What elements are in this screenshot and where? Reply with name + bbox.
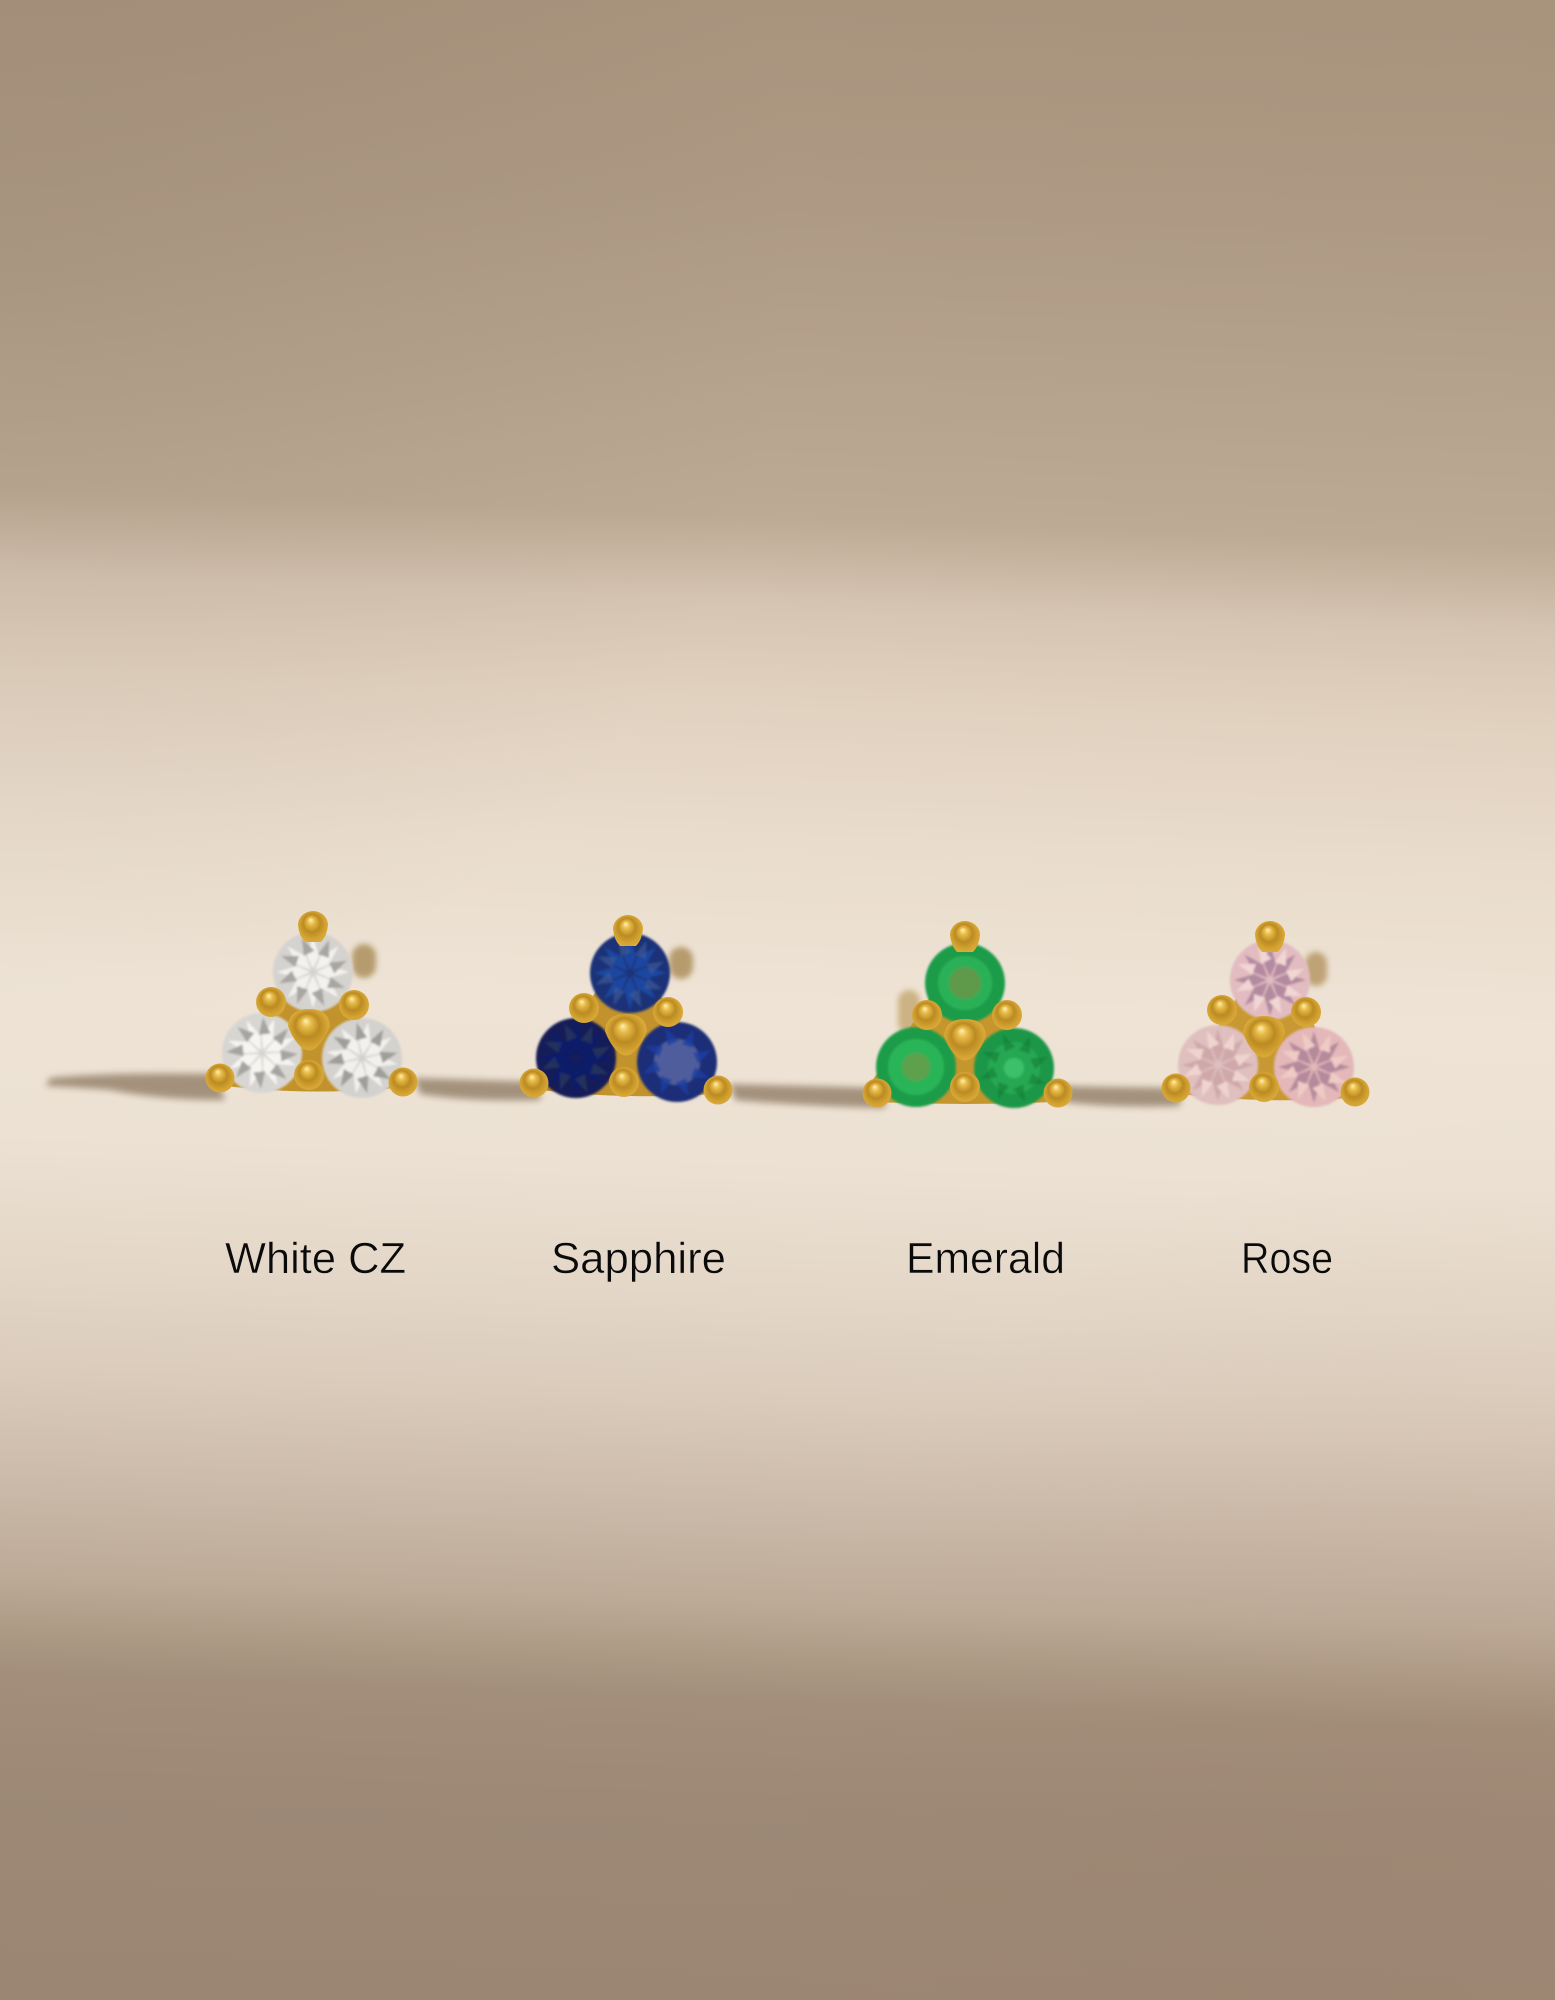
post of rose earring	[1305, 952, 1327, 986]
prongs	[206, 911, 418, 1096]
stone: left	[216, 1007, 308, 1099]
stone: right	[637, 1022, 717, 1102]
earring shadows on surface	[46, 1074, 1180, 1108]
stone: top	[925, 943, 1005, 1023]
stone: left	[876, 1027, 956, 1107]
prongs	[520, 915, 732, 1104]
stone: right	[320, 1016, 404, 1100]
earring: White CZ	[206, 911, 418, 1100]
stone: left	[536, 1018, 616, 1098]
stone: top	[1230, 940, 1310, 1020]
earring: Sapphire	[520, 915, 732, 1104]
post of white earring	[352, 944, 376, 978]
prongs	[862, 921, 1072, 1108]
earring: Rose	[1162, 921, 1370, 1107]
stone: right	[1274, 1027, 1354, 1107]
gold setting	[872, 948, 1052, 1102]
prongs	[1162, 921, 1370, 1106]
label: Rose: Rose	[1241, 1234, 1333, 1283]
stone: top	[273, 932, 353, 1012]
gold setting	[226, 940, 396, 1090]
stone: top	[590, 933, 670, 1013]
gold setting	[540, 942, 712, 1094]
earring: Emerald	[862, 921, 1072, 1108]
label: Emerald: Emerald	[906, 1234, 1065, 1283]
stone: right	[974, 1028, 1054, 1108]
stone: left	[1178, 1025, 1258, 1105]
post of sapphire earring	[669, 947, 693, 979]
post of emerald earring	[898, 990, 920, 1034]
gold setting	[1180, 948, 1350, 1098]
label: Sapphire: Sapphire	[551, 1234, 726, 1283]
label: White CZ: White CZ	[225, 1234, 406, 1283]
